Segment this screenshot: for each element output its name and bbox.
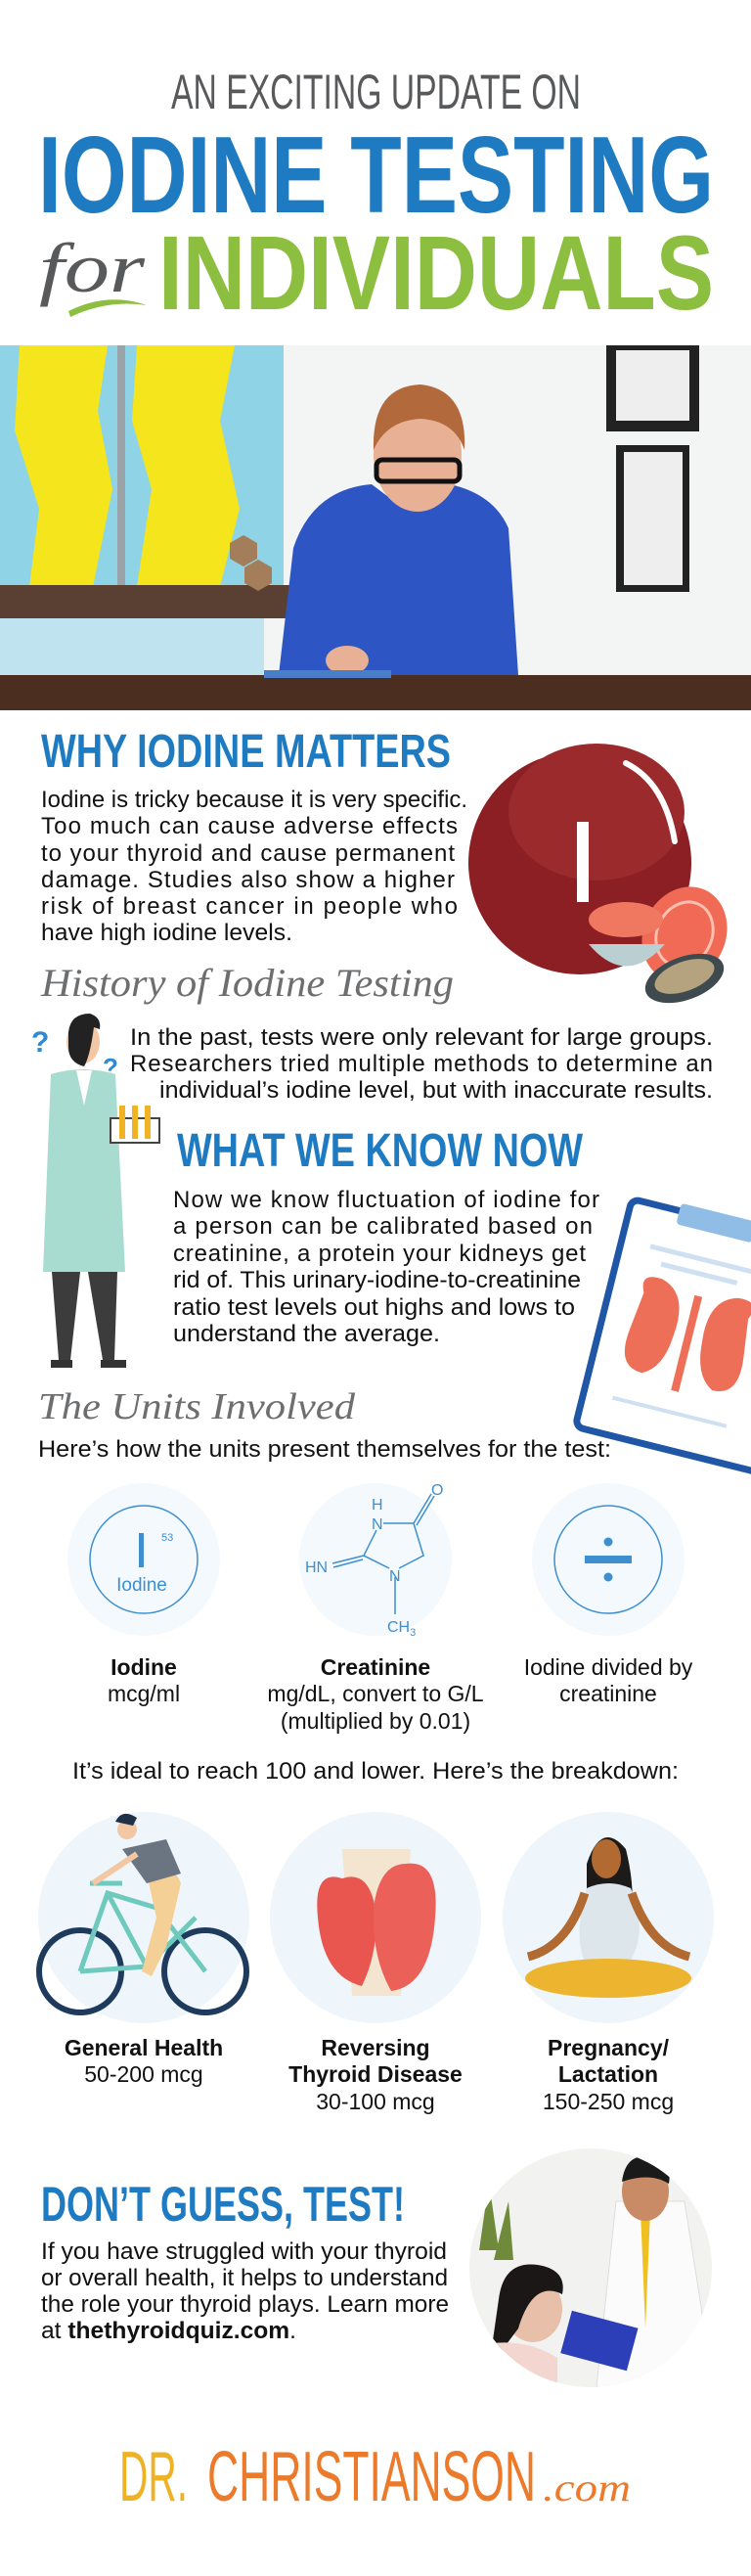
icon: divide [532, 1483, 685, 1636]
text: what we know now: Now we know fluctuation of iodine for [173, 1187, 599, 1213]
illustration: scientist: ? [103, 1053, 118, 1082]
text: why iodine matters [41, 787, 467, 946]
photo: doctor writing [0, 345, 751, 710]
text: why iodine matters: Iodine is tricky because it is very specific. [41, 787, 467, 813]
logo: drchristianson.com: .com [543, 2465, 631, 2509]
labels: units: mcg/ml [108, 1681, 180, 1706]
labels: breakdown: 150-250 mcg [543, 2089, 674, 2114]
text: why iodine matters: Too much can cause adverse effects [41, 813, 458, 839]
text: why iodine matters: to your thyroid and cause permanent [41, 840, 455, 867]
text: what we know now: ratio test levels out highs and lows to [173, 1294, 575, 1321]
text: what we know now: a person can be calibrated based on [173, 1213, 593, 1240]
title [38, 65, 714, 332]
labels: breakdown: Thyroid Disease [288, 2061, 463, 2087]
text: units intro: Here’s how the units present themselves for the test: [38, 1436, 611, 1463]
icon: iodine element [67, 1483, 220, 1636]
icon: thyroid [270, 1812, 481, 2023]
title: for [39, 229, 146, 307]
labels: units: creatinine [559, 1681, 657, 1706]
labels: units [108, 1654, 693, 1734]
icon: creatinine molecule: 3 [410, 1627, 416, 1639]
icon: creatinine molecule: N [372, 1516, 383, 1533]
heading: what we know now: WHAT WE KNOW NOW [177, 1125, 584, 1177]
labels: breakdown: Lactation [558, 2061, 658, 2087]
logo: drchristianson.com: DR. [119, 2438, 188, 2516]
text: cta: the role your thyroid plays. Learn more [41, 2291, 449, 2318]
icon: iodine element: Iodine [116, 1575, 167, 1596]
text: history [130, 1024, 713, 1104]
text: what we know now [173, 1187, 599, 1347]
labels: units: (multiplied by 0.01) [281, 1708, 470, 1734]
labels: breakdown: Pregnancy/ [548, 2035, 670, 2060]
icon: creatinine molecule: HN [305, 1559, 328, 1576]
text: cta: or overall health, it helps to understand [41, 2265, 448, 2291]
illustration: scientist: ? [31, 1026, 49, 1059]
icon: creatinine molecule [299, 1482, 452, 1639]
illustration: scientist [31, 1014, 159, 1368]
icon: cyclist [38, 1812, 249, 2023]
text: why iodine matters: damage. Studies also show a higher [41, 867, 455, 893]
labels: units: Iodine divided by [524, 1654, 693, 1680]
labels: units: Iodine [110, 1654, 177, 1680]
logo: drchristianson.com: CHRISTIANSON [207, 2438, 536, 2516]
heading: the units involved: The Units Involved [38, 1386, 356, 1427]
heading: history of iodine testing: History of Iodine Testing [40, 961, 454, 1005]
labels: units: mg/dL, convert to G/L [267, 1681, 484, 1706]
text: what we know now: creatinine, a protein your kidneys get [173, 1241, 586, 1267]
icon: iodine element: 53 [161, 1532, 173, 1544]
text: what we know now: understand the average. [173, 1321, 440, 1347]
icon: clipboard with kidneys [575, 1192, 751, 1474]
text: why iodine matters: risk of breast cancer in people who [41, 893, 458, 920]
icon: creatinine molecule: O [431, 1482, 443, 1499]
labels: breakdown [65, 2035, 674, 2114]
icon: creatinine molecule: CH [387, 1619, 410, 1636]
labels: breakdown: 50-200 mcg [84, 2061, 203, 2087]
text: history: In the past, tests were only relevant for large groups. [130, 1024, 713, 1051]
text: history: Researchers tried multiple methods to determine an [130, 1051, 713, 1077]
labels: breakdown: 30-100 mcg [316, 2089, 435, 2114]
heading: why iodine matters: WHY IODINE MATTERS [41, 726, 451, 778]
text: why iodine matters: have high iodine levels. [41, 920, 292, 946]
logo: drchristianson.com [119, 2438, 631, 2516]
text: history: individual’s iodine level, but with inaccurate results. [159, 1077, 713, 1104]
labels: breakdown: General Health [65, 2035, 223, 2060]
photo: doctor and patient [467, 2147, 714, 2392]
icon: creatinine molecule: H [372, 1497, 383, 1514]
text: cta [41, 2238, 449, 2344]
icon: creatinine molecule: N [389, 1568, 401, 1585]
text: cta: at thethyroidquiz.com. [41, 2318, 296, 2344]
text: what we know now: rid of. This urinary-iodine-to-creatinine [173, 1267, 581, 1293]
labels: units: Creatinine [321, 1654, 430, 1680]
text: cta: If you have struggled with your thyroid [41, 2238, 447, 2265]
text: breakdown intro: It’s ideal to reach 100 and lower. Here’s the breakdown: [72, 1758, 679, 1785]
icon: pregnant yoga woman [503, 1812, 714, 2023]
icon: iodine red ball with seafood [468, 744, 742, 1013]
heading: don't guess, test: DON’T GUESS, TEST! [41, 2177, 405, 2232]
labels: breakdown: Reversing [321, 2035, 430, 2060]
